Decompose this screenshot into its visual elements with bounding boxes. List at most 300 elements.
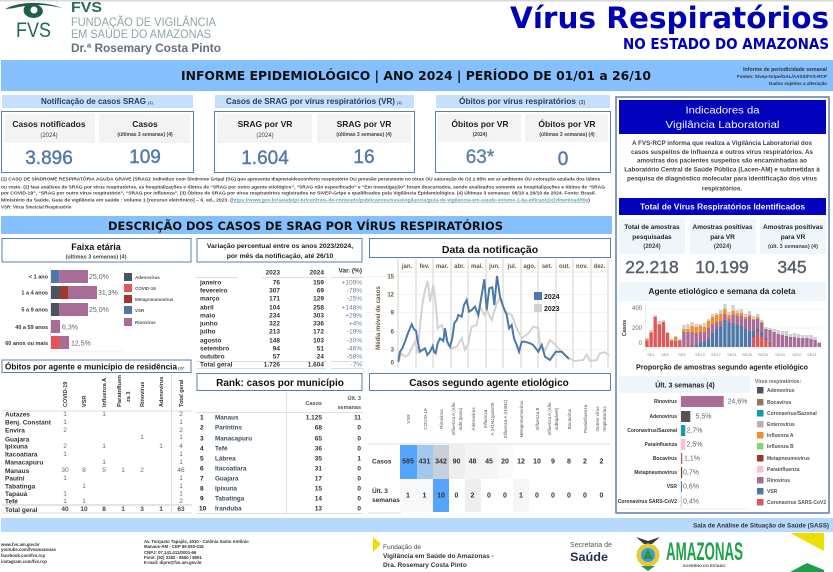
panel: casos segundo agente etiológico (368, 374, 610, 513)
panel: óbitos por agente e município (2, 360, 192, 514)
panel: notificação de casos SRAG (2, 95, 194, 172)
footer: address: Manaus-AM - CEP 69.093-018 (144, 544, 204, 549)
table: monthly variation: Var. (%) (339, 268, 362, 274)
bar chart: proportion by agent: 2,7% (686, 428, 702, 434)
KPI: amostras positivas últimas 3 semanas: 345 (777, 257, 807, 277)
panel: casos de SRAG por vírus respiratórios: 1.604 (241, 148, 289, 169)
legend: age groups: VSR (135, 308, 145, 313)
panel: notificação de casos SRAG: (1) (148, 100, 154, 105)
line chart: moving average by month: fev. (420, 264, 430, 270)
footer: address: Fone: (92) 3182 - 8550 / 8551 (144, 555, 202, 560)
table: municipality ranking: Últ. 3 (348, 395, 361, 402)
heatmap: cases by agent: Adenovírus (471, 407, 476, 431)
heatmap: cases by agent: Rinovírus (439, 409, 444, 429)
logo: fundação de vigilância (373, 537, 494, 569)
footnote text: ou rosto. (2) Nas análises de SRAG por vírus respiratórios, as hospitalizações e óbitos de “SRAG por outro agente etiológico”, “SRAG não especificado” e “Em investigação” foram descartados, sendo analisados somente as hospitalizações e óbitos de “SRAG (1, 184, 606, 190)
decoration: corner shapes (790, 533, 824, 572)
table: deaths by agent and municipality: 2 (140, 467, 144, 474)
logo: institution name: FUNDAÇÃO DE VIGILÂNCIA (71, 14, 216, 29)
table: deaths by agent and municipality: Benj. Constant (5, 420, 52, 426)
heatmap: cases by agent: 45 (485, 458, 493, 466)
logo: FVS eye: FVS (16, 19, 51, 42)
table: monthly variation: +109% (342, 280, 362, 286)
table: municipality ranking: 7 (200, 476, 204, 482)
table: monthly variation: março (200, 296, 220, 302)
panel: faixa etária: (últimas 3 semanas) (4) (66, 254, 127, 260)
panel: notificação de casos SRAG: Casos (132, 119, 158, 129)
table: monthly variation: +4% (349, 320, 362, 328)
heading: indicadores: Vigilância Laboratorial (666, 120, 780, 131)
table: municipality ranking: 5 (200, 456, 204, 462)
heatmap: cases by agent: 9 (551, 458, 555, 466)
table: deaths by agent and municipality: Tefé (5, 498, 18, 506)
footer: address: CNPJ: 07.141.411/0001-66 (144, 550, 197, 555)
table: monthly variation: 103 (313, 338, 324, 344)
table: deaths by agent and municipality: Manacapuru (5, 460, 43, 466)
table: deaths by agent and municipality: 1 (63, 411, 67, 418)
table: municipality ranking: Casos (305, 401, 322, 407)
bar chart: proportion by agent: 0,4% (683, 498, 699, 506)
panel: casos de SRAG por vírus respiratórios: (2024) (256, 133, 274, 139)
table: deaths by agent and municipality: 1 (121, 467, 125, 474)
heatmap: cases by agent: 48 (469, 458, 476, 466)
table: deaths by agent and municipality: 1 (159, 506, 163, 513)
logo: fundação de vigilância: Vigilância em Saúde do Amazonas - (383, 553, 494, 560)
footer: web addresses: youtube.com/fvsamazonas (1, 547, 57, 552)
stacked bar chart: agent by week: SE21 (727, 352, 738, 357)
table: deaths by agent and municipality: Guajara (5, 436, 30, 444)
legend: respiratory viruses: Parainfluenza (767, 467, 800, 473)
stacked bar chart: agent by week: Casos (622, 320, 628, 336)
panel: notificação de casos SRAG: Casos notificados (12, 119, 86, 129)
bar chart: proportion by agent: Coronavírus/Sazonal (627, 428, 678, 434)
heatmap: cases by agent: 0 (535, 492, 539, 500)
panel: óbitos por vírus respiratórios (436, 95, 610, 172)
table: monthly variation: 94 (273, 346, 280, 352)
table: deaths by agent and municipality: 5 (102, 467, 106, 474)
footnote text: VSR: Vírus Sincicial Respiratório (1, 204, 72, 210)
bar chart: proportion by agent: Últ. 3 semanas (4) (655, 380, 715, 390)
logo: fundação de vigilância: Fundação de (383, 544, 421, 551)
table: deaths by agent and municipality: 1 (102, 443, 106, 450)
heatmap: cases by agent: 0 (551, 492, 555, 500)
heading: indicadores (619, 100, 826, 134)
text block: laboratory surveillance: respiratórios. (702, 186, 742, 192)
table: deaths by agent and municipality: za 3 (126, 392, 132, 402)
legend: respiratory viruses: VSR (767, 489, 778, 495)
table: monthly variation: 234 (269, 312, 280, 320)
heatmap: cases by agent: subtipável) (554, 407, 559, 430)
table: municipality ranking: Guajara (215, 476, 239, 482)
stacked bar chart: agent by week (622, 302, 822, 357)
bar chart: proportion by agent: 0,6% (683, 484, 699, 490)
table: monthly variation: 159 (313, 280, 324, 286)
table: deaths by agent and municipality: 1 (63, 419, 67, 426)
table: deaths by agent and municipality: 1 (179, 459, 183, 466)
heatmap: cases by agent: Influenza A (não (547, 402, 552, 435)
heatmap: cases by agent: 10 (533, 458, 541, 466)
table: monthly variation: +29% (345, 312, 362, 320)
KPI: amostras positivas últimas 3 semanas (760, 219, 826, 277)
table: monthly variation: 172 (313, 328, 324, 336)
heatmap: cases by agent: 585 (402, 458, 414, 466)
table: monthly variation: junho (199, 320, 218, 328)
heatmap: cases by agent: 8 (567, 458, 571, 466)
footer: web addresses: facebook.com/fvs.rcp (1, 553, 46, 558)
stacked bar chart: agent by week: SE41 (807, 352, 818, 357)
heading: total de vírus identificados (619, 198, 826, 215)
legend: age groups: Metapneumovírus (135, 297, 174, 302)
banner: informe epidemiológico: Informe de periodicidade semanal (743, 67, 828, 73)
bar chart: proportion by agent: VSR (667, 484, 677, 490)
panel: notificação de casos SRAG: 109 (129, 147, 161, 168)
line chart: moving average by month: 15 (387, 274, 395, 280)
heatmap: cases by agent: COVID-19 (423, 408, 428, 430)
table: monthly variation: -25% (347, 296, 362, 302)
banner: informe epidemiológico: INFORME EPIDEMIOLÓGICO | ANO 2024 | PERÍODO DE 01/01 a 26/10 (181, 68, 651, 83)
footnote text (1, 174, 606, 210)
table: municipality ranking: Itacoatiara (215, 466, 247, 472)
table: municipality ranking (196, 392, 363, 514)
KPI: total de amostras: pesquisadas (632, 234, 672, 241)
panel: casos de SRAG por vírus respiratórios (214, 95, 414, 172)
text block: laboratory surveillance: A FVS-RCP informa que realiza a Vigilância Laboratorial dos (632, 140, 813, 147)
footer: address: Av. Torquato Tapajós, 4010 - Colônia Santo Antônio (144, 539, 249, 544)
heading: indicadores: Indicadores da (686, 106, 760, 116)
stacked bar chart: age groups: 40 a 59 anos (15, 325, 48, 331)
panel: faixa etária (2, 238, 191, 351)
table: municipality ranking: 1.125 (306, 414, 322, 422)
heatmap: cases by agent: Últ. 3 (372, 486, 388, 495)
KPI: amostras positivas últimas 3 semanas: Amostras positivas (763, 224, 823, 231)
panel: casos de SRAG por vírus respiratórios: 16 (353, 147, 375, 168)
bar chart: proportion by agent: Adenovírus (649, 414, 677, 420)
bar chart: proportion by agent: 24,6% (728, 398, 747, 406)
table: deaths by agent and municipality: 46 (177, 467, 185, 474)
line chart: moving average by month: out. (559, 264, 570, 270)
stacked bar chart: agent by week: SE37 (792, 352, 803, 357)
stacked bar chart: age groups: 25,0% (89, 307, 109, 314)
table: monthly variation (196, 268, 364, 368)
table: monthly variation: 2024 (310, 270, 324, 276)
bar chart: proportion by agent: Rinovírus (654, 399, 677, 405)
table: deaths by agent and municipality: 1 (63, 490, 67, 498)
table: deaths by agent and municipality: Adenovírus (159, 377, 165, 407)
table: municipality ranking: 17 (315, 476, 322, 482)
heatmap: cases by agent: 0 (567, 492, 571, 500)
heatmap: cases by agent: 20 (501, 458, 509, 466)
title: Vírus Respiratórios (510, 1, 829, 35)
banner: descrição dos casos (1, 216, 612, 234)
heading: agente etiológico e semana: Agente etiológico e semana da coleta (648, 287, 796, 296)
footnote text: por COVID-19”, “SRAG por outro vírus respiratório”, “SRAG por influenza”. (3) Óbitos de SRAG por vírus respiratórios registrados no SIVEP-Gripe e qualificados pela Vigilância Epidemiológica. (4) Últimas 3 semanas: 06/10 a 26/10 de 2024. Fonte: Brasil. (1, 188, 596, 196)
logo: governo do Amazonas: AMAZONAS (666, 538, 743, 566)
title (510, 1, 829, 53)
footer: web addresses: www.fvs.am.gov.br (0, 542, 40, 547)
heatmap: cases by agent: 90 (453, 458, 460, 466)
heatmap: cases by agent: 342 (435, 458, 447, 466)
heatmap: cases by agent: 0 (487, 492, 491, 500)
stacked bar chart: age groups: 12,5% (71, 340, 91, 348)
panel: indicadores da vigilância laboratorial (616, 97, 829, 513)
panel: notificação de casos SRAG: Notificação de casos SRAG (41, 97, 146, 106)
footer: address (144, 539, 249, 565)
line chart: moving average by month: mai. (471, 264, 483, 270)
table: deaths by agent and municipality: 1 (82, 483, 86, 490)
table: municipality ranking: 3 (200, 436, 204, 442)
legend: respiratory viruses: Vírus respiratórios: (755, 379, 801, 385)
table: deaths by agent and municipality: 10 (80, 506, 88, 513)
line chart: moving average by month: dez. (594, 264, 606, 270)
table: municipality ranking: 0 (357, 436, 361, 442)
table: municipality ranking: 31 (315, 466, 322, 472)
line chart: moving average by month: nov. (576, 264, 588, 270)
panel: variação percentual: por mês da notificação, até 26/10 (227, 253, 333, 260)
legend: respiratory viruses: Coronavírus SARS-CoV2 (767, 500, 826, 506)
KPI: amostras positivas últimas 3 semanas: para VR (781, 234, 806, 241)
table: monthly variation: setembro (200, 346, 229, 352)
table: deaths by agent and municipality: 2 (63, 427, 67, 434)
logo: secretaria de saúde (570, 542, 612, 564)
table: municipality ranking: 8 (200, 486, 204, 492)
table: deaths by agent and municipality: 8 (82, 467, 86, 474)
line chart: moving average by month: Média móvel de casos (376, 286, 382, 350)
table: monthly variation: -19% (347, 328, 362, 336)
heatmap: cases by agent: 431 (419, 458, 430, 466)
table: municipality ranking: Tefé (215, 446, 228, 452)
panel: notificação de casos SRAG: (2024) (40, 133, 58, 139)
table: deaths by agent and municipality: 1 (63, 498, 67, 505)
bar chart: proportion by agent: Parainfluenza (644, 442, 677, 448)
stacked bar chart: agent by week: SE1 (647, 352, 656, 357)
table: monthly variation: 24 (317, 354, 324, 360)
table: municipality ranking: 68 (315, 424, 322, 432)
table: municipality ranking: 15 (315, 486, 322, 492)
table: deaths by agent and municipality: 1 (82, 498, 86, 505)
legend: respiratory viruses: Rinovírus (767, 478, 790, 484)
panel: óbitos por vírus respiratórios: 0 (558, 149, 568, 170)
stacked bar chart: agent by week: SE33 (775, 352, 786, 357)
heading: proporção de amostras: Proporção de amostras segundo agente etiológico (636, 364, 808, 372)
table: deaths by agent and municipality: 1 (159, 443, 163, 450)
stacked bar chart: agent by week: 0 (639, 341, 643, 347)
footer: web addresses (0, 542, 57, 564)
table: municipality ranking: 6 (200, 466, 204, 472)
footer: address: E-mail: dipre@fvs.am.gov.br (144, 560, 202, 565)
heatmap: cases by agent: Outros vírus (595, 406, 600, 432)
text block: laboratory surveillance: casos suspeitos de Influenza e outros vírus respiratórios. As (631, 149, 814, 156)
KPI: amostras positivas 2024 (690, 219, 756, 277)
table: monthly variation: 303 (313, 312, 324, 320)
panel: óbitos por agente e município: (3)* (178, 366, 185, 370)
table: deaths by agent and municipality: 1 (102, 459, 106, 466)
panel: casos de SRAG por vírus respiratórios: SRAG por VR (238, 119, 292, 129)
panel: óbitos por vírus respiratórios: (3) (579, 100, 585, 106)
table: monthly variation: janeiro (199, 280, 221, 286)
stacked bar chart: age groups: 6,3% (62, 324, 78, 332)
table: monthly variation: 76 (273, 280, 280, 286)
legend: respiratory viruses: Influenza A (767, 433, 794, 439)
heatmap: cases by agent: VSR (406, 414, 411, 424)
legend: respiratory viruses: Influenza B (767, 444, 794, 450)
stacked bar chart: age groups: 60 anos ou mais (5, 341, 48, 347)
table: municipality ranking: 0 (357, 424, 361, 432)
text block: laboratory surveillance: amostras dos pacientes suspeitos são encaminhadas ao (637, 158, 807, 164)
line chart: moving average by month: 6 (391, 330, 395, 336)
table: monthly variation: fevereiro (200, 288, 227, 294)
table: municipality ranking: 35 (315, 456, 322, 462)
heatmap: cases by agent: 0 (583, 492, 587, 500)
table: deaths by agent and municipality: 2 (63, 443, 67, 450)
heatmap: cases by agent: 1 (519, 492, 523, 500)
table: monthly variation: 104 (269, 304, 280, 312)
heading: total de vírus identificados: Total de Vírus Respiratórios Identificados (640, 202, 806, 212)
heatmap: cases by agent: A (H1N1)pdm09 (490, 402, 495, 435)
bar chart: proportion by agent: Bocavírus (653, 456, 677, 462)
banner: sala de análise (1, 518, 833, 532)
table: monthly variation: julho (199, 328, 216, 336)
table: municipality ranking: Ipixuna (215, 486, 238, 492)
footnote text: (1) CASO DE SÍNDROME RESPIRATÓRIA AGUDA GRAVE (SRAG): Indivíduo com Síndrome Gripal (SG) que apresenta dispneia/desconforto respiratório OU pressão persistente no tórax OU saturação de O2 ≤ 95% em ar ambiente OU coloração azulada dos lábios (1, 174, 601, 182)
table: deaths by agent and municipality: Parainfluen (117, 374, 123, 407)
panel: óbitos por vírus respiratórios: (últimas 3 semanas) (4) (539, 132, 595, 138)
table: municipality ranking: Tabatinga (215, 496, 245, 502)
line chart: moving average by month: 2024 (544, 294, 560, 301)
bar chart: proportion by agent: 0,7% (683, 470, 699, 476)
table: deaths by agent and municipality: 8 (102, 506, 106, 513)
table: deaths by agent and municipality: 1 (140, 434, 144, 441)
panel: data da notificação (366, 238, 610, 368)
heatmap: cases by agent: semanas (372, 497, 400, 504)
table: deaths by agent and municipality: VSR (82, 396, 88, 407)
footnote text: Ministério da Saúde. Guia de vigilância em saúde : volume 1 [recurso eletrônico] – 6. ed., 2023. ( https://www.gov.br/saude/pt-br/centrais-de-conteudo/publicacoes/svsa/vigilancia/guia-de-vigilancia-em-saude-volume-1-6a-edicao/@@download/file ) (1, 198, 591, 202)
stacked bar chart: age groups: 1 a 4 anos (21, 290, 48, 296)
banner: informe epidemiológico (1, 60, 833, 91)
table: monthly variation: 1.726 (264, 362, 280, 368)
bar chart: proportion by agent: 5,5% (696, 414, 711, 420)
panel: notificação de casos SRAG: 3.896 (25, 148, 73, 169)
table: deaths by agent and municipality: 2 (179, 411, 183, 418)
heatmap: cases by agent: Influenza A (H3N2) (503, 399, 508, 438)
legend: respiratory viruses: Adenovírus (767, 388, 795, 394)
table: municipality ranking: 11 (354, 414, 361, 422)
table: deaths by agent and municipality: 1 (63, 475, 67, 482)
table: monthly variation: outubro (200, 354, 225, 360)
table: deaths by agent and municipality: Influenza A (102, 378, 108, 407)
line chart: moving average by month: abr. (454, 264, 465, 270)
panel: casos de SRAG por vírus respiratórios: (2) (397, 100, 403, 105)
table: monthly variation: 57 (273, 354, 280, 360)
table: monthly variation: 148 (269, 338, 280, 344)
panel: casos segundo agente etiológico: Casos segundo agente etiológico (409, 378, 569, 389)
table: deaths by agent and municipality: 1 (121, 506, 125, 513)
stacked bar chart: age groups: < 1 ano (29, 274, 49, 280)
line chart: moving average by month: jan. (401, 264, 412, 270)
table: monthly variation: -30% (347, 338, 362, 344)
table: municipality ranking: 36 (315, 446, 322, 452)
table: deaths by agent and municipality: 1 (63, 451, 67, 458)
KPI: amostras positivas últimas 3 semanas: (últ. 3 semanas) (4) (768, 244, 818, 250)
line chart: moving average by month: 12 (387, 292, 395, 298)
table: deaths by agent and municipality: Total geral (179, 379, 185, 407)
table: deaths by agent and municipality: Manaus (5, 468, 30, 475)
table: municipality ranking: semanas (337, 405, 361, 411)
table: municipality ranking: 10 (199, 506, 207, 512)
table: monthly variation: 2023 (266, 270, 280, 276)
heatmap: cases by agent: 0 (503, 492, 507, 500)
bar chart: proportion by agent: 2,5% (686, 442, 702, 448)
panel: óbitos por vírus respiratórios: (2024) (473, 132, 488, 138)
heatmap: cases by agent: Metapneumovírus (519, 400, 524, 437)
heatmap: cases by agent: 1 (423, 492, 427, 500)
line chart: moving average by month: ago. (523, 264, 536, 270)
legend: respiratory viruses: Enterovírus (767, 422, 795, 428)
panel: casos de SRAG por vírus respiratórios: Casos de SRAG por vírus respiratórios (VR) (226, 97, 395, 106)
table: municipality ranking: 9 (200, 496, 204, 502)
KPI: amostras positivas 2024: 10.199 (695, 257, 749, 277)
table: monthly variation: 258 (313, 304, 324, 312)
legend: age groups: Adenovírus (135, 275, 160, 280)
text block: laboratory surveillance (624, 140, 820, 192)
table: deaths by agent and municipality: 40 (61, 506, 69, 513)
table: municipality ranking: Iranduba (215, 506, 242, 512)
heatmap: cases by agent: subt./poss) (458, 407, 463, 430)
table: municipality ranking: 0 (357, 446, 361, 452)
table: monthly variation: -7% (350, 362, 362, 368)
table: deaths by agent and municipality (2, 374, 192, 514)
table: deaths by agent and municipality: Itacoatiara (5, 452, 38, 458)
panel: data da notificação: Data da notificação (442, 244, 538, 256)
table: deaths by agent and municipality: 1 (179, 475, 183, 482)
KPI: total de amostras: (2024) (643, 244, 661, 250)
panel: rank de casos por município (196, 374, 363, 514)
line chart: moving average by month: mar. (436, 264, 449, 270)
KPI: total de amostras: 22.218 (625, 257, 679, 277)
table: municipality ranking: 13 (315, 506, 322, 512)
logo: secretaria de saúde: Secretaria de (570, 542, 612, 549)
table: monthly variation: 307 (269, 288, 280, 294)
logo: fundação de vigilância: Dra. Rosemary Costa Pinto (383, 562, 467, 569)
table: municipality ranking: 1 (357, 456, 361, 462)
table: municipality ranking: 0 (357, 476, 361, 482)
stacked bar chart: agent by week: SE17 (711, 352, 722, 357)
legend: age groups (124, 273, 174, 326)
table: monthly variation: 213 (269, 328, 280, 336)
stacked bar chart: age groups: 25,0% (89, 274, 109, 281)
line chart: moving average by month: set. (542, 264, 552, 270)
table: municipality ranking: 0 (357, 486, 361, 492)
stacked bar chart: agent by week: 400 (632, 306, 643, 312)
panel: casos de SRAG por vírus respiratórios: (últimas 3 semanas) (4) (336, 132, 392, 138)
table: deaths by agent and municipality: 1 (102, 411, 106, 418)
table: monthly variation: 69 (317, 288, 324, 294)
footer: web addresses: instagram.com/fvs.rcp (1, 559, 47, 564)
table: deaths by agent and municipality: Autazes (5, 412, 30, 418)
table: deaths by agent and municipality: 2 (179, 427, 183, 434)
heatmap: cases by agent: respiratórios (602, 406, 607, 432)
table: deaths by agent and municipality: 1 (179, 483, 183, 490)
table: monthly variation: abril (200, 304, 214, 312)
legend: respiratory viruses (755, 379, 826, 506)
table: deaths by agent and municipality: Envira (5, 428, 25, 434)
panel: óbitos por agente e município: Óbitos por agente e município de residência (5, 362, 178, 372)
heatmap: cases by agent: Influenza A (não (451, 402, 456, 435)
text block: laboratory surveillance: pesquisa de diagnóstico molecular para identificação dos vírus (627, 176, 818, 182)
banner: informe epidemiológico: Dados sujeitos a alteração (769, 81, 827, 86)
heatmap: cases by agent (368, 399, 610, 513)
table: deaths by agent and municipality: 4 (179, 443, 183, 450)
legend: respiratory viruses: Bocavírus (767, 400, 791, 406)
